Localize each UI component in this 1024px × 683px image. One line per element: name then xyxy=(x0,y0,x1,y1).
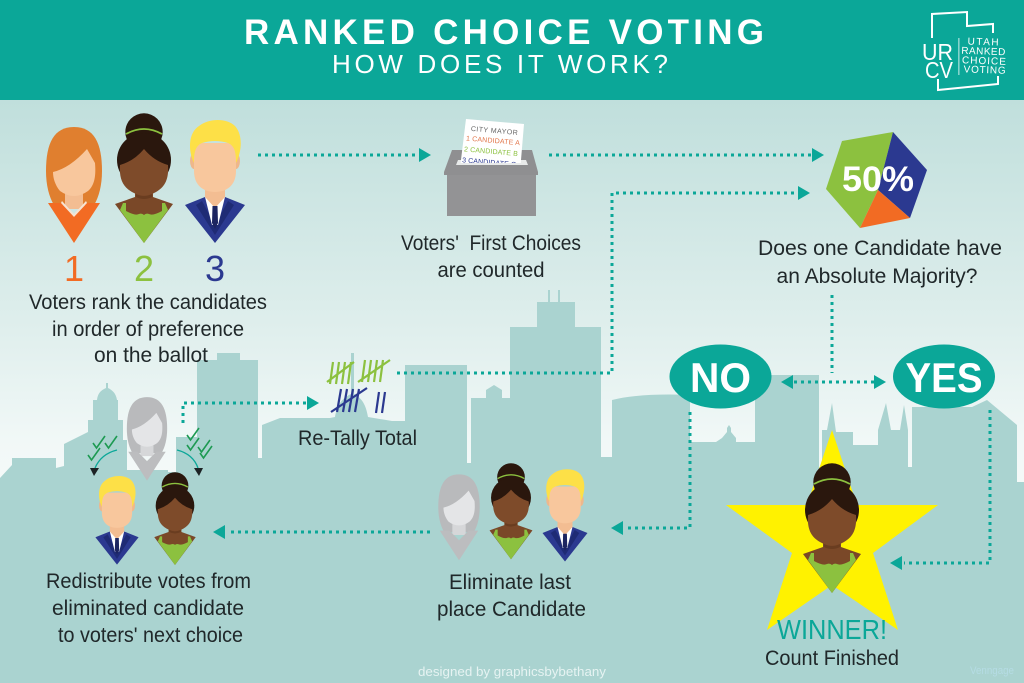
text: redistribute: to voters' next choice xyxy=(58,624,243,647)
tally marks xyxy=(327,360,390,413)
logo: RANKED xyxy=(961,46,1005,58)
vote checks right xyxy=(177,428,212,476)
icon: majority hexagon: 50% xyxy=(842,160,914,199)
text: majority question xyxy=(758,237,1002,288)
eliminated candidate xyxy=(438,474,480,560)
NO bubble xyxy=(670,344,772,408)
candidates ranked xyxy=(46,113,245,289)
watermark: Venngage xyxy=(970,665,1014,677)
rank numerals: 2 xyxy=(134,248,154,289)
text: redistribute: eliminated candidate xyxy=(52,597,244,620)
credit: designed by graphicsbybethany xyxy=(418,664,607,679)
vote checks left xyxy=(88,436,117,476)
icon: majority hexagon xyxy=(826,132,927,228)
remaining candidate: woman xyxy=(154,472,196,565)
text: voters rank: in order of preference xyxy=(52,318,244,341)
background sky xyxy=(0,100,1024,500)
logo: UR xyxy=(922,39,953,65)
eliminate last place candidates xyxy=(438,463,588,562)
ballot box: CITY MAYOR xyxy=(471,126,518,137)
eliminated candidate with redistribution xyxy=(88,397,212,565)
text: eliminate: place Candidate xyxy=(437,598,586,621)
text: voters rank: on the ballot xyxy=(94,344,208,367)
dotted arrows xyxy=(183,155,990,563)
text: eliminate xyxy=(437,571,586,621)
arrowheads xyxy=(213,148,902,570)
rank numerals xyxy=(64,248,225,289)
text: eliminate: Eliminate last xyxy=(449,571,571,594)
logo: CHOICE xyxy=(962,55,1006,68)
text: winner: WINNER! xyxy=(777,614,887,645)
eliminated candidate xyxy=(127,397,167,481)
text: redistribute: Redistribute votes from xyxy=(46,570,251,593)
winner star xyxy=(726,430,938,630)
logo: UTAH xyxy=(967,36,999,49)
logo: VOTING xyxy=(963,64,1006,77)
candidate 1 xyxy=(46,127,102,243)
city skyline silhouette xyxy=(0,290,1024,683)
text: re-tally total: Re-Tally Total xyxy=(298,427,417,450)
candidate xyxy=(490,463,532,559)
candidate xyxy=(542,469,588,562)
text: majority question: Does one Candidate have xyxy=(758,237,1002,260)
YES bubble: YES xyxy=(906,354,982,401)
text: first choices: are counted xyxy=(438,259,544,282)
rank numerals: 1 xyxy=(64,248,84,289)
candidate 2 xyxy=(115,113,173,243)
YES bubble xyxy=(893,344,995,408)
text: first choices: Voters' First Choices xyxy=(401,232,581,255)
ballot box xyxy=(444,119,538,216)
ballot box: 3 CANDIDATE C xyxy=(462,157,516,169)
text: voters rank xyxy=(29,291,267,367)
text: majority question: an Absolute Majority? xyxy=(776,265,978,288)
remaining candidate: man xyxy=(95,476,139,565)
logo xyxy=(922,12,1007,90)
candidate 3 xyxy=(185,120,245,243)
text: first choices xyxy=(401,232,581,282)
title: RANKED CHOICE VOTING xyxy=(244,13,764,52)
ballot box: 2 CANDIDATE B xyxy=(464,146,518,158)
header band xyxy=(0,0,1024,100)
rank numerals: 3 xyxy=(205,248,225,289)
text: redistribute xyxy=(46,570,251,647)
text: count finished: Count Finished xyxy=(765,647,899,670)
logo: CV xyxy=(925,57,954,83)
ballot box: 1 CANDIDATE A xyxy=(466,135,520,147)
text: voters rank: Voters rank the candidates xyxy=(29,291,267,314)
subtitle: HOW DOES IT WORK? xyxy=(332,49,668,79)
NO bubble: NO xyxy=(690,354,751,401)
